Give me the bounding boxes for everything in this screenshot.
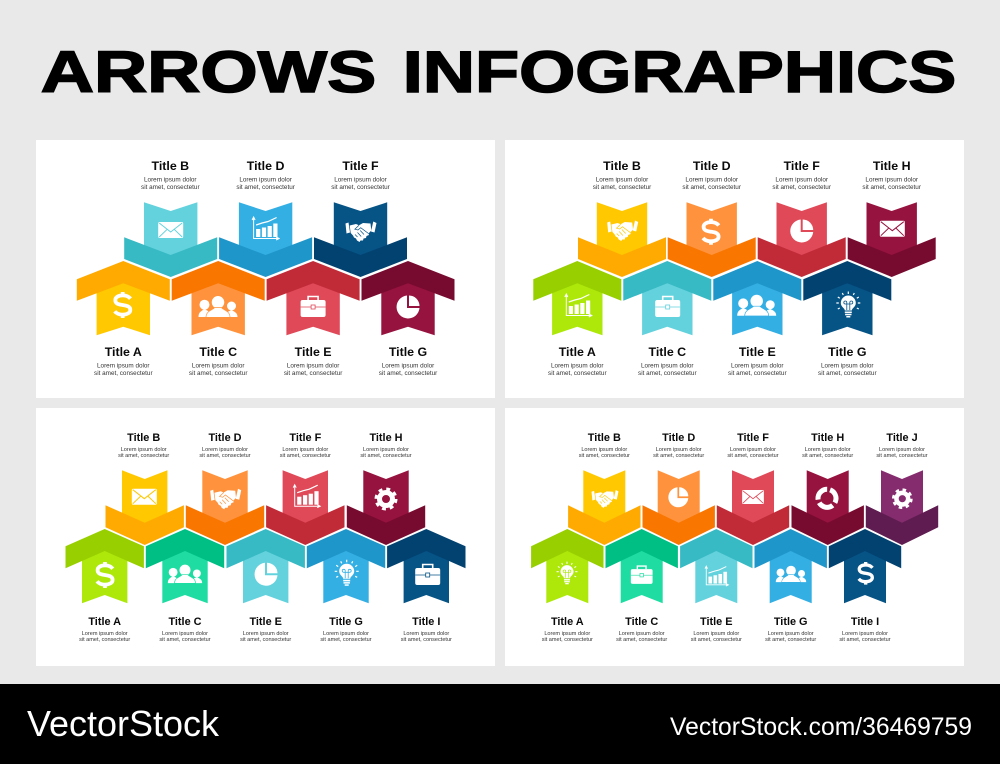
step A [77, 261, 170, 377]
arrow A [77, 261, 170, 335]
arrow A [66, 529, 144, 603]
label C: Title C [168, 616, 202, 628]
icon: cycle [815, 487, 839, 510]
label I: sit amet, consectetur [401, 637, 452, 643]
icon: dollar [859, 562, 872, 585]
label B: Lorem ipsum dolor [144, 177, 197, 184]
icon: mail [742, 490, 764, 504]
icon: gear [893, 490, 911, 508]
icon: briefcase [655, 296, 680, 317]
label D: Lorem ipsum dolor [239, 177, 292, 184]
label J: sit amet, consectetur [876, 453, 928, 459]
label C: Lorem ipsum dolor [192, 363, 244, 370]
icon: pie [668, 487, 688, 507]
step G [307, 529, 385, 643]
arrow B [578, 202, 666, 277]
label A: Lorem ipsum dolor [544, 631, 590, 637]
step A [531, 529, 604, 643]
panel: 7-step arrows [36, 140, 495, 398]
icon: briefcase [415, 564, 440, 585]
label I: Lorem ipsum dolor [842, 631, 888, 637]
arrow I [829, 529, 901, 603]
label B: sit amet, consectetur [118, 453, 169, 459]
arrow A [531, 529, 604, 603]
step J [866, 432, 938, 545]
footer bar [0, 684, 1000, 764]
label F: sit amet, consectetur [280, 453, 331, 459]
title: ARROWS [41, 40, 376, 105]
arrow C [146, 529, 224, 603]
label B: sit amet, consectetur [579, 453, 630, 459]
label A: Lorem ipsum dolor [82, 631, 128, 637]
step D [186, 432, 264, 545]
arrow H [347, 470, 425, 545]
icon: briefcase [301, 296, 326, 317]
label G: Lorem ipsum dolor [768, 631, 814, 637]
label D: Lorem ipsum dolor [202, 447, 248, 453]
step I [829, 529, 901, 643]
icon: mail [158, 222, 183, 238]
step H [347, 432, 425, 545]
arrow F [758, 202, 846, 277]
arrow I [387, 529, 466, 603]
label A: Title A [105, 345, 142, 359]
label F: Lorem ipsum dolor [282, 447, 328, 453]
arrow F [314, 202, 407, 277]
step A [66, 529, 144, 643]
label D: sit amet, consectetur [682, 184, 741, 191]
label G: sit amet, consectetur [765, 637, 816, 643]
label H: sit amet, consectetur [360, 453, 412, 459]
step A [533, 261, 621, 377]
arrow C [623, 261, 711, 335]
label F: Title F [289, 432, 322, 444]
label H: Lorem ipsum dolor [865, 177, 918, 184]
arrow D [642, 470, 715, 545]
label D: Title D [662, 432, 695, 444]
label D: Lorem ipsum dolor [685, 177, 738, 184]
arrow G [754, 529, 827, 603]
label D: sit amet, consectetur [236, 184, 295, 191]
step C [606, 529, 678, 643]
label C: Title C [648, 345, 686, 359]
icon: chart [293, 485, 320, 508]
step G [754, 529, 827, 643]
arrow B [568, 470, 640, 545]
step E [713, 261, 801, 377]
step I [387, 529, 465, 643]
label D: Title D [247, 159, 284, 173]
label A: Title A [551, 616, 584, 628]
arrow F [717, 470, 789, 545]
icon: people [168, 564, 202, 583]
label C: sit amet, consectetur [616, 637, 667, 643]
label A: Lorem ipsum dolor [551, 363, 604, 370]
label F: Lorem ipsum dolor [775, 177, 828, 184]
label J: Title J [886, 432, 918, 444]
step C [146, 529, 224, 643]
icon: chart [252, 217, 279, 240]
step D [668, 159, 756, 277]
label E: Title E [739, 345, 776, 359]
label D: Title D [693, 159, 731, 173]
icon: chart [565, 294, 592, 317]
label I: Lorem ipsum dolor [403, 631, 449, 637]
arrow H [848, 202, 936, 277]
label H: Title H [873, 159, 911, 173]
label B: Lorem ipsum dolor [596, 177, 648, 184]
arrow D [668, 202, 756, 277]
icon: people [737, 294, 776, 316]
step B [568, 432, 640, 545]
arrow E [680, 529, 752, 603]
icon: light bulb [557, 562, 577, 584]
label B: Title B [127, 432, 160, 444]
label H: sit amet, consectetur [802, 453, 853, 459]
label H: Title H [811, 432, 844, 444]
step H [848, 159, 936, 277]
label E: sit amet, consectetur [284, 370, 342, 377]
panel background [36, 140, 495, 398]
label I: Title I [412, 616, 440, 628]
footer background [0, 684, 1000, 764]
step H [792, 432, 864, 545]
step E [227, 529, 305, 643]
icon: people [198, 296, 238, 317]
step B [106, 432, 184, 545]
arrow J [866, 470, 938, 545]
label H: Lorem ipsum dolor [363, 447, 409, 453]
step D [219, 159, 312, 277]
panel: 10-step arrows [505, 408, 964, 666]
icon: mail [880, 221, 905, 237]
arrow C [172, 261, 265, 335]
label B: Lorem ipsum dolor [581, 447, 627, 453]
step C [623, 261, 711, 377]
arrow G [307, 529, 385, 603]
label C: Lorem ipsum dolor [619, 631, 665, 637]
step C [172, 261, 265, 377]
label F: Title F [737, 432, 769, 444]
step B [124, 159, 217, 277]
label B: Title B [603, 159, 641, 173]
arrow D [186, 470, 264, 545]
icon: mail [132, 489, 157, 505]
label C: Lorem ipsum dolor [162, 631, 208, 637]
label B: sit amet, consectetur [593, 184, 651, 191]
label E: Lorem ipsum dolor [243, 631, 289, 637]
title: INFOGRAPHICS [403, 40, 956, 105]
arrow E [227, 529, 305, 603]
label F: Lorem ipsum dolor [730, 447, 776, 453]
icon: gear [376, 489, 396, 509]
arrow B [124, 202, 217, 277]
icon: dollar [115, 292, 130, 318]
icon: handshake [346, 222, 376, 242]
label F: Lorem ipsum dolor [334, 177, 387, 184]
arrow E [713, 261, 801, 335]
arrow A [533, 261, 621, 335]
step E [680, 529, 752, 643]
step F [314, 159, 407, 277]
icon: light bulb [836, 292, 860, 318]
label F: sit amet, consectetur [331, 184, 390, 191]
label A: Title A [88, 616, 121, 628]
label C: sit amet, consectetur [159, 637, 211, 643]
arrow E [267, 261, 360, 335]
label C: Lorem ipsum dolor [641, 363, 694, 370]
label D: Lorem ipsum dolor [656, 447, 702, 453]
label G: Title G [329, 616, 363, 628]
label B: Title B [588, 432, 621, 444]
label G: Title G [389, 345, 427, 359]
step B [578, 159, 666, 277]
label H: Lorem ipsum dolor [805, 447, 851, 453]
step F [758, 159, 846, 277]
label G: Title G [828, 345, 866, 359]
label A: sit amet, consectetur [542, 637, 593, 643]
image URL: VectorStock.com/36469759 [670, 713, 972, 741]
label G: Lorem ipsum dolor [382, 363, 434, 370]
label E: Title E [249, 616, 282, 628]
label A: Title A [559, 345, 596, 359]
arrow G [362, 261, 454, 335]
icon: handshake [210, 489, 241, 509]
label G: Title G [774, 616, 808, 628]
title [41, 40, 956, 105]
label D: Title D [208, 432, 242, 444]
arrow H [792, 470, 864, 545]
label H: Title H [369, 432, 403, 444]
arrow B [106, 470, 184, 545]
label E: sit amet, consectetur [728, 370, 787, 377]
icon: pie [255, 563, 278, 586]
arrow D [219, 202, 312, 277]
icon: dollar [703, 219, 719, 245]
brand name: VectorStock [27, 703, 220, 744]
label E: Lorem ipsum dolor [693, 631, 739, 637]
label G: Lorem ipsum dolor [323, 631, 369, 637]
label C: sit amet, consectetur [638, 370, 697, 377]
icon: briefcase [631, 566, 653, 584]
label H: sit amet, consectetur [862, 184, 921, 191]
label C: sit amet, consectetur [189, 370, 247, 377]
label C: Title C [625, 616, 658, 628]
arrow F [266, 470, 344, 545]
label E: Lorem ipsum dolor [287, 363, 339, 370]
panel: 9-step arrows [36, 408, 495, 666]
panel background [36, 408, 495, 666]
label F: sit amet, consectetur [727, 453, 779, 459]
label D: sit amet, consectetur [653, 453, 704, 459]
label F: Title F [784, 159, 820, 173]
icon: pie [790, 220, 813, 242]
label E: sit amet, consectetur [691, 637, 742, 643]
label F: Title F [342, 159, 379, 173]
arrow G [803, 261, 891, 335]
label I: sit amet, consectetur [839, 637, 891, 643]
step G [362, 261, 454, 377]
label G: sit amet, consectetur [818, 370, 877, 377]
label J: Lorem ipsum dolor [879, 447, 925, 453]
label B: sit amet, consectetur [141, 184, 200, 191]
label E: Lorem ipsum dolor [731, 363, 784, 370]
step G [803, 261, 891, 377]
label E: Title E [700, 616, 733, 628]
label E: Title E [295, 345, 332, 359]
label A: Lorem ipsum dolor [97, 363, 150, 370]
icon: dollar [97, 562, 113, 588]
icon: pie [397, 296, 420, 318]
label B: Title B [151, 159, 189, 173]
label I: Title I [851, 616, 879, 628]
label D: sit amet, consectetur [199, 453, 251, 459]
icon: people [776, 565, 806, 582]
icon: handshake [607, 220, 638, 241]
panel: 8-step arrows [505, 140, 964, 398]
label B: Lorem ipsum dolor [121, 447, 167, 453]
label G: Lorem ipsum dolor [821, 363, 874, 370]
label C: Title C [199, 345, 237, 359]
step D [642, 432, 715, 545]
step F [717, 432, 789, 545]
icon: light bulb [335, 560, 359, 586]
arrow C [606, 529, 678, 603]
panel background [505, 408, 964, 666]
label G: sit amet, consectetur [379, 370, 437, 377]
step E [267, 261, 360, 377]
icon: handshake [592, 490, 618, 508]
icon: chart [705, 566, 728, 586]
step F [266, 432, 344, 545]
label A: sit amet, consectetur [548, 370, 607, 377]
label E: sit amet, consectetur [240, 637, 291, 643]
panel background [505, 140, 964, 398]
label A: sit amet, consectetur [79, 637, 130, 643]
label F: sit amet, consectetur [772, 184, 831, 191]
label G: sit amet, consectetur [320, 637, 372, 643]
label A: sit amet, consectetur [94, 370, 153, 377]
